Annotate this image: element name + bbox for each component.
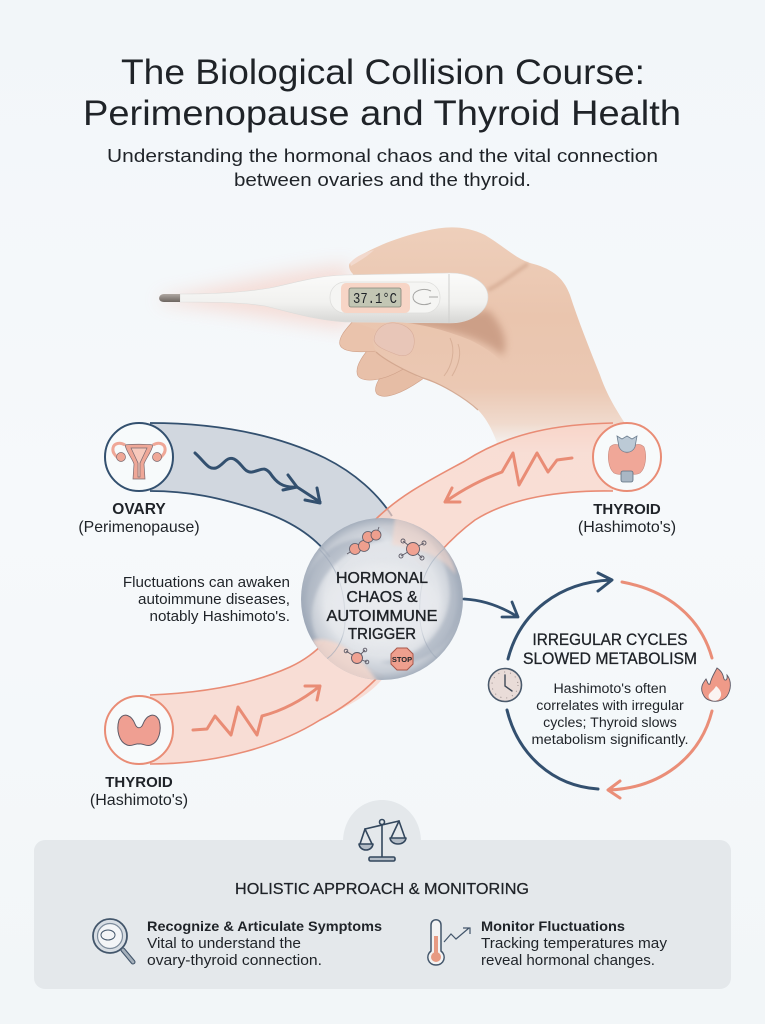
- hand: palm and index finger: [349, 227, 640, 452]
- cycle heading: [523, 631, 697, 668]
- subtitle: [107, 145, 658, 190]
- thermometer display glow: [341, 283, 410, 313]
- label: ovary: [78, 501, 200, 536]
- icon: scales: [359, 820, 406, 861]
- hand: index finger nail: [350, 250, 374, 266]
- arrow: sphere to cycle: [464, 599, 518, 617]
- label: ovary: (Perimenopause): [78, 519, 200, 536]
- label: thyroid left: (Hashimoto's): [90, 792, 188, 809]
- illustration: hand holding thermometer: [159, 227, 640, 452]
- icon: thyroid gland: [118, 715, 160, 746]
- cycle heading: SLOWED METABOLISM: [523, 650, 697, 668]
- sphere label: [326, 570, 438, 643]
- band: ovary outline: [150, 423, 392, 557]
- label: thyroid right: (Hashimoto's): [578, 519, 676, 536]
- icon: thermometer with trend: [428, 920, 470, 965]
- icon: molecule lower left: [344, 648, 369, 664]
- panel tab: [343, 800, 421, 842]
- node: thyroid left: [105, 696, 173, 764]
- text: fluctuations note: [123, 574, 290, 625]
- band: right thyroid outline: [375, 423, 613, 552]
- label: thyroid right: [578, 501, 676, 536]
- item: monitor fluctuations: [481, 918, 668, 969]
- sphere: hormonal chaos: [301, 516, 463, 682]
- thermometer body: [180, 273, 488, 323]
- icon: magnifier: [93, 919, 133, 962]
- thermometer reading: 37.1°C: [353, 291, 397, 308]
- label: thyroid left: [90, 774, 188, 809]
- cycle body text: cycles; Thyroid slows: [543, 715, 677, 731]
- subtitle: Understanding the hormonal chaos and the vital connection: [107, 145, 658, 166]
- thermometer power button: [413, 289, 438, 305]
- node: thyroid right: [593, 423, 661, 491]
- hand: thumb lower edge: [376, 352, 478, 410]
- sphere label: AUTOIMMUNE: [326, 608, 438, 625]
- label: ovary: OVARY: [112, 501, 166, 518]
- hand: ring finger: [357, 345, 408, 380]
- panel heading: HOLISTIC APPROACH & MONITORING: [235, 881, 529, 898]
- text: fluctuations note: notably Hashimoto's.: [150, 608, 290, 625]
- sphere label: TRIGGER: [348, 626, 416, 643]
- cycle ring: [507, 573, 712, 798]
- item: monitor fluctuations: Monitor Fluctuations: [481, 918, 625, 934]
- cycle heading: IRREGULAR CYCLES: [532, 631, 688, 649]
- cycle body text: [532, 681, 688, 748]
- arc: coral top: [622, 582, 712, 658]
- panel background: [34, 840, 731, 989]
- arc: blue bottom: [507, 710, 598, 789]
- band: left thyroid pathway: [150, 642, 385, 764]
- band: left thyroid outline: [150, 642, 376, 764]
- hand: pinky finger: [375, 360, 424, 396]
- item: monitor fluctuations: Tracking temperatures may: [481, 936, 668, 952]
- arrow: right thyroid zigzag: [445, 453, 572, 502]
- panel: holistic approach: [34, 800, 731, 989]
- icon: uterus and ovaries: [113, 443, 165, 479]
- sphere label: CHAOS &: [346, 589, 418, 606]
- hand: middle finger: [340, 320, 410, 352]
- icon: clock: [488, 668, 522, 702]
- cycle body text: correlates with irregular: [536, 698, 684, 714]
- text: fluctuations note: autoimmune diseases,: [138, 591, 290, 608]
- title: Perimenopause and Thyroid Health: [83, 94, 681, 133]
- icon: stop sign: STOP: [392, 655, 412, 664]
- item: recognize symptoms: ovary-thyroid connection.: [147, 953, 322, 969]
- text: fluctuations note: Fluctuations can awaken: [123, 574, 290, 591]
- arrow: left thyroid zigzag: [193, 686, 320, 735]
- item: recognize symptoms: [147, 918, 382, 969]
- arrow: ovary wave: [195, 453, 320, 503]
- hand: thumb nail: [374, 323, 414, 356]
- hand: shadow under thermometer: [410, 310, 505, 356]
- thermometer tip: [159, 294, 180, 302]
- node: ovary: [105, 423, 173, 491]
- item: recognize symptoms: Recognize & Articulate Symptoms: [147, 918, 382, 934]
- cycle body text: Hashimoto's often: [553, 681, 667, 697]
- hand: thumb creases: [444, 338, 460, 376]
- arc: coral bottom: [608, 711, 712, 798]
- icon: molecule chain: [347, 527, 381, 554]
- thermometer LCD: [349, 288, 401, 307]
- label: thyroid right: THYROID: [593, 501, 661, 518]
- hand: index knuckle shading: [488, 264, 528, 290]
- band: right thyroid pathway: [375, 423, 613, 570]
- thermometer button housing: [330, 282, 440, 313]
- thermometer glow: [160, 265, 350, 330]
- cycle body text: metabolism significantly.: [532, 732, 688, 748]
- item: recognize symptoms: Vital to understand the: [147, 936, 301, 952]
- band: ovary pathway: [150, 423, 392, 570]
- item: monitor fluctuations: reveal hormonal changes.: [481, 953, 655, 969]
- title: The Biological Collision Course:: [121, 53, 645, 92]
- icon: molecule upper right: [399, 539, 426, 560]
- sphere label: HORMONAL: [336, 570, 428, 587]
- title: [83, 53, 681, 133]
- label: thyroid left: THYROID: [105, 774, 173, 791]
- sphere swirls: [301, 516, 463, 682]
- icon: flame: [702, 668, 730, 701]
- arc: blue top: [508, 573, 612, 659]
- icon: thyroid with trachea: [608, 436, 646, 482]
- thermometer seam: [448, 274, 450, 323]
- subtitle: between ovaries and the thyroid.: [234, 169, 531, 190]
- hand: thumb: [373, 322, 512, 412]
- icon: stop sign: [391, 648, 413, 670]
